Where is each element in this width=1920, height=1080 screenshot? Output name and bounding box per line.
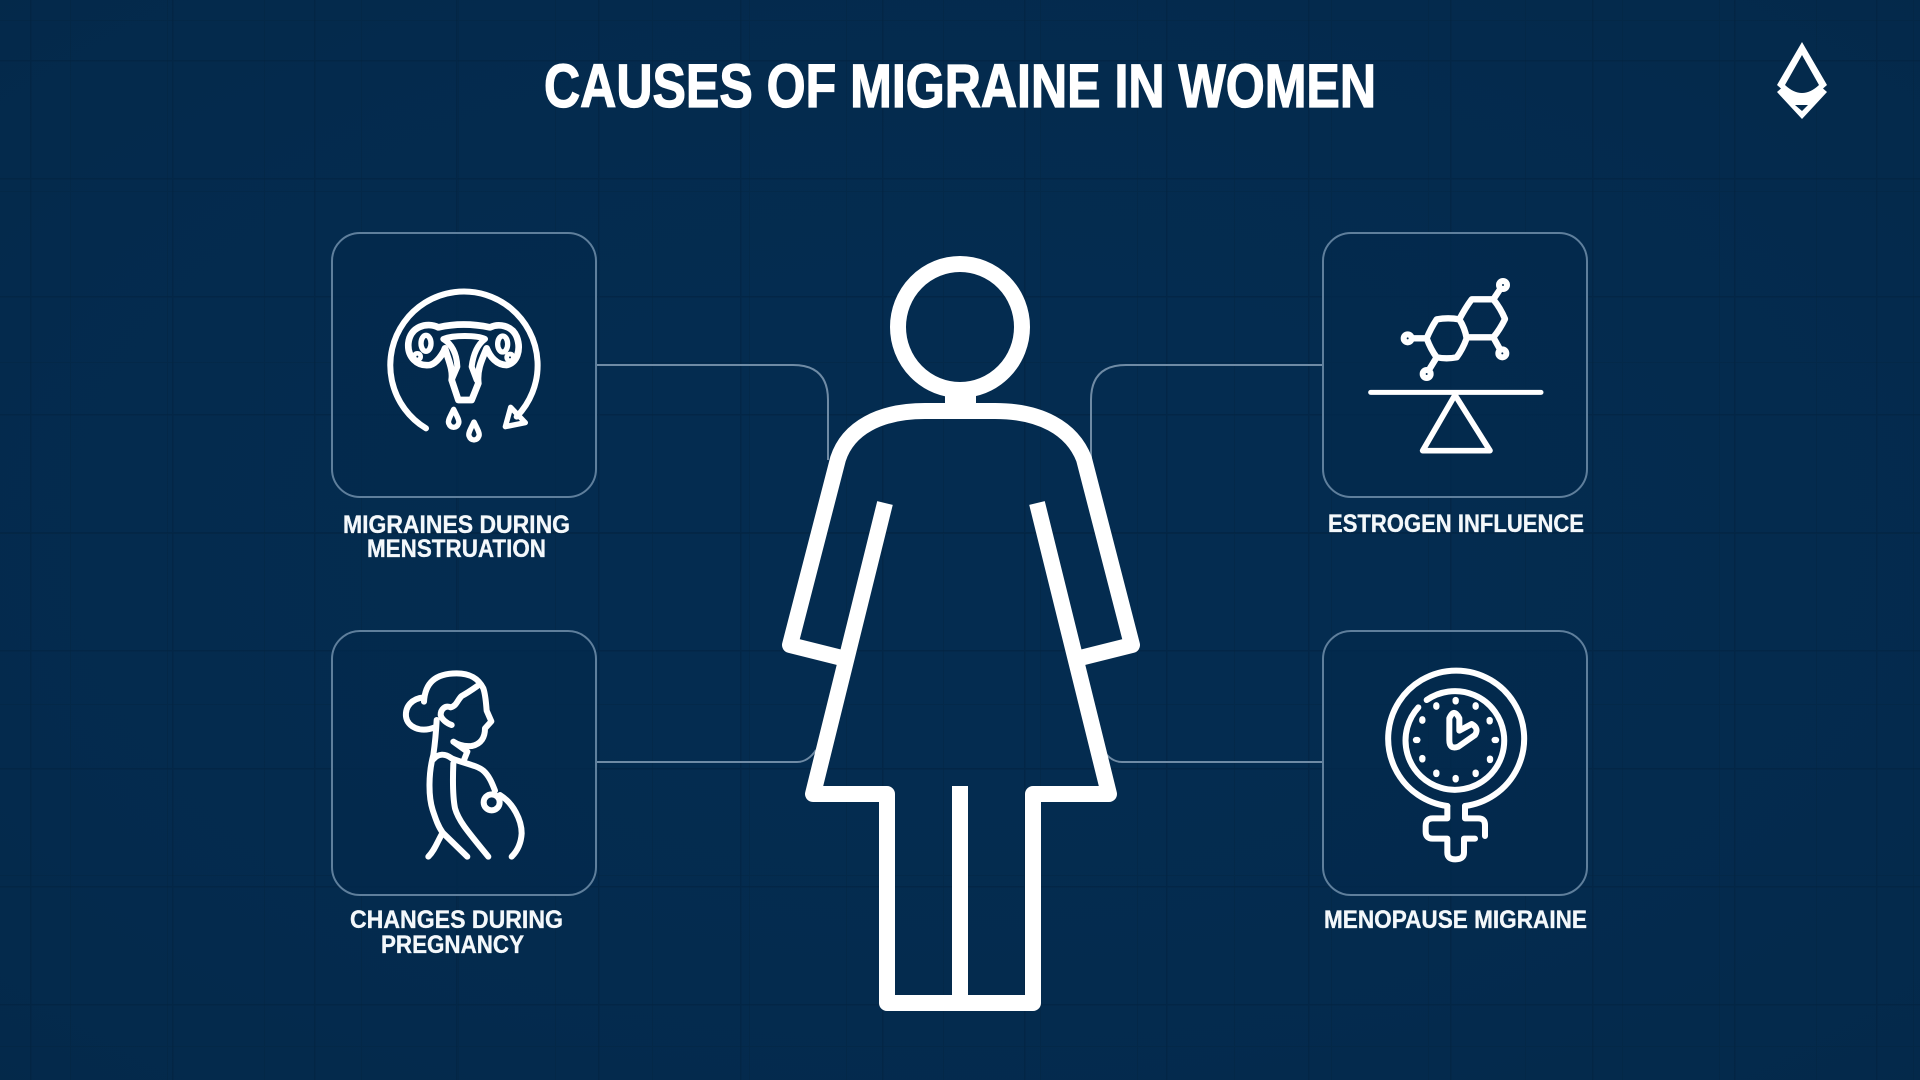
icon: molecule on balance [1371,281,1541,451]
label: PREGNANCY [381,931,524,959]
panel: changes during pregnancy [332,631,596,959]
connector: menopause to figure [1103,750,1323,762]
label: MENSTRUATION [367,535,546,563]
icon: clock in female symbol [1388,671,1524,859]
label [350,906,563,959]
label: MIGRAINES DURING [343,511,570,539]
label [343,511,570,563]
title: CAUSES OF MIGRAINE IN WOMEN [544,52,1376,120]
label: CHANGES DURING [350,906,563,934]
panel: menopause migraine [1323,631,1587,934]
connector: menstruation to figure [596,365,828,460]
icon: pregnant woman [406,673,522,857]
central female figure [790,264,1132,1003]
icon: uterus cycle [390,292,538,440]
label: MENOPAUSE MIGRAINE [1324,906,1587,934]
panel: migraines during menstruation [332,233,596,563]
label: ESTROGEN INFLUENCE [1328,510,1584,538]
connector: pregnancy to figure [596,750,816,762]
figure body [790,392,1132,1003]
panel: estrogen influence [1323,233,1587,538]
icon: logo [1777,42,1827,119]
connector: estrogen to figure [1091,365,1323,460]
figure head [898,264,1022,390]
